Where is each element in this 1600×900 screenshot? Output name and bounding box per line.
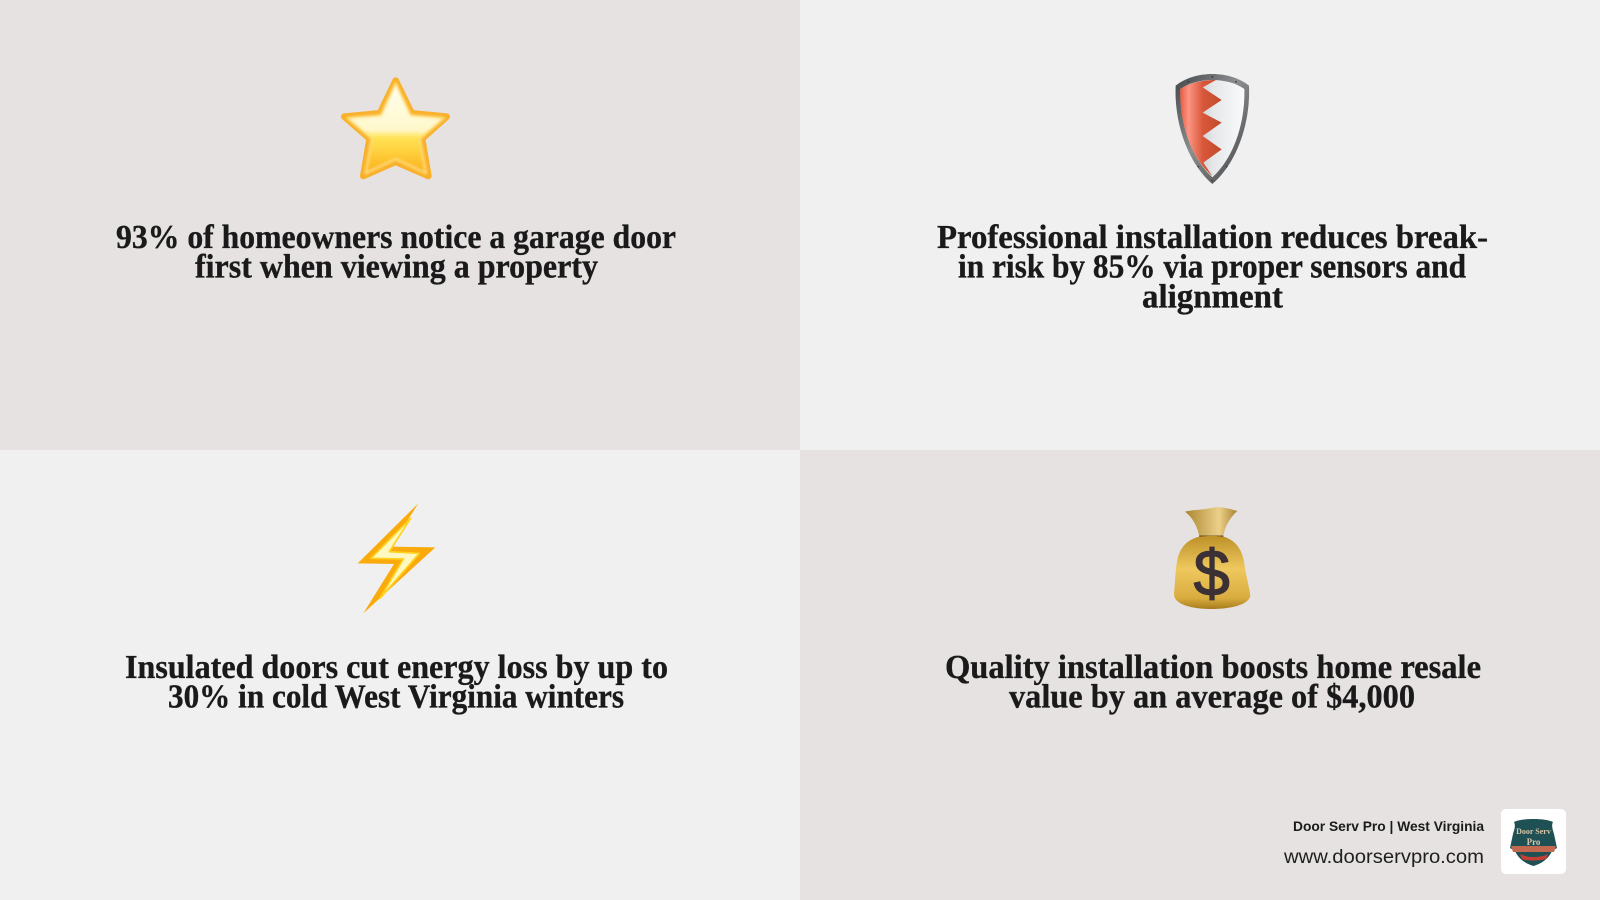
icon: lightning bolt [358, 503, 435, 613]
panel: homeowners notice [0, 0, 800, 450]
heading: resale stat [945, 649, 1481, 716]
heading: first impression stat: first when viewing a property [195, 248, 598, 286]
heading: break-in stat: in risk by 85% via proper sensors and [958, 248, 1466, 286]
heading: energy stat [125, 649, 668, 716]
heading: break-in stat: Professional installation reduces break- [937, 219, 1488, 256]
logo: Pro [1527, 837, 1541, 847]
dollar sign: $ [1194, 536, 1230, 609]
heading: energy stat: Insulated doors cut energy loss by up to [125, 649, 668, 686]
footer: brand [1283, 809, 1566, 874]
brand name: Door Serv Pro | West Virginia [1293, 818, 1484, 834]
icon: money bag [1174, 507, 1250, 609]
icon: star [344, 81, 447, 176]
heading: resale stat: Quality installation boosts home resale [945, 649, 1481, 686]
heading: break-in stat: alignment [1142, 278, 1284, 316]
logo [1501, 809, 1566, 874]
heading: first impression stat [116, 219, 676, 286]
panel: security [800, 0, 1600, 450]
website: www.doorservpro.com [1283, 847, 1484, 868]
logo: Door Serv [1516, 827, 1551, 836]
heading: resale stat: value by an average of $4,000 [1009, 678, 1415, 716]
heading: break-in stat [937, 219, 1488, 316]
panel: energy [0, 450, 800, 900]
heading: first impression stat: 93% of homeowners notice a garage door [116, 219, 676, 256]
panel: resale value [800, 450, 1600, 900]
icon: shield [1176, 74, 1249, 184]
heading: energy stat: 30% in cold West Virginia winters [168, 678, 624, 716]
